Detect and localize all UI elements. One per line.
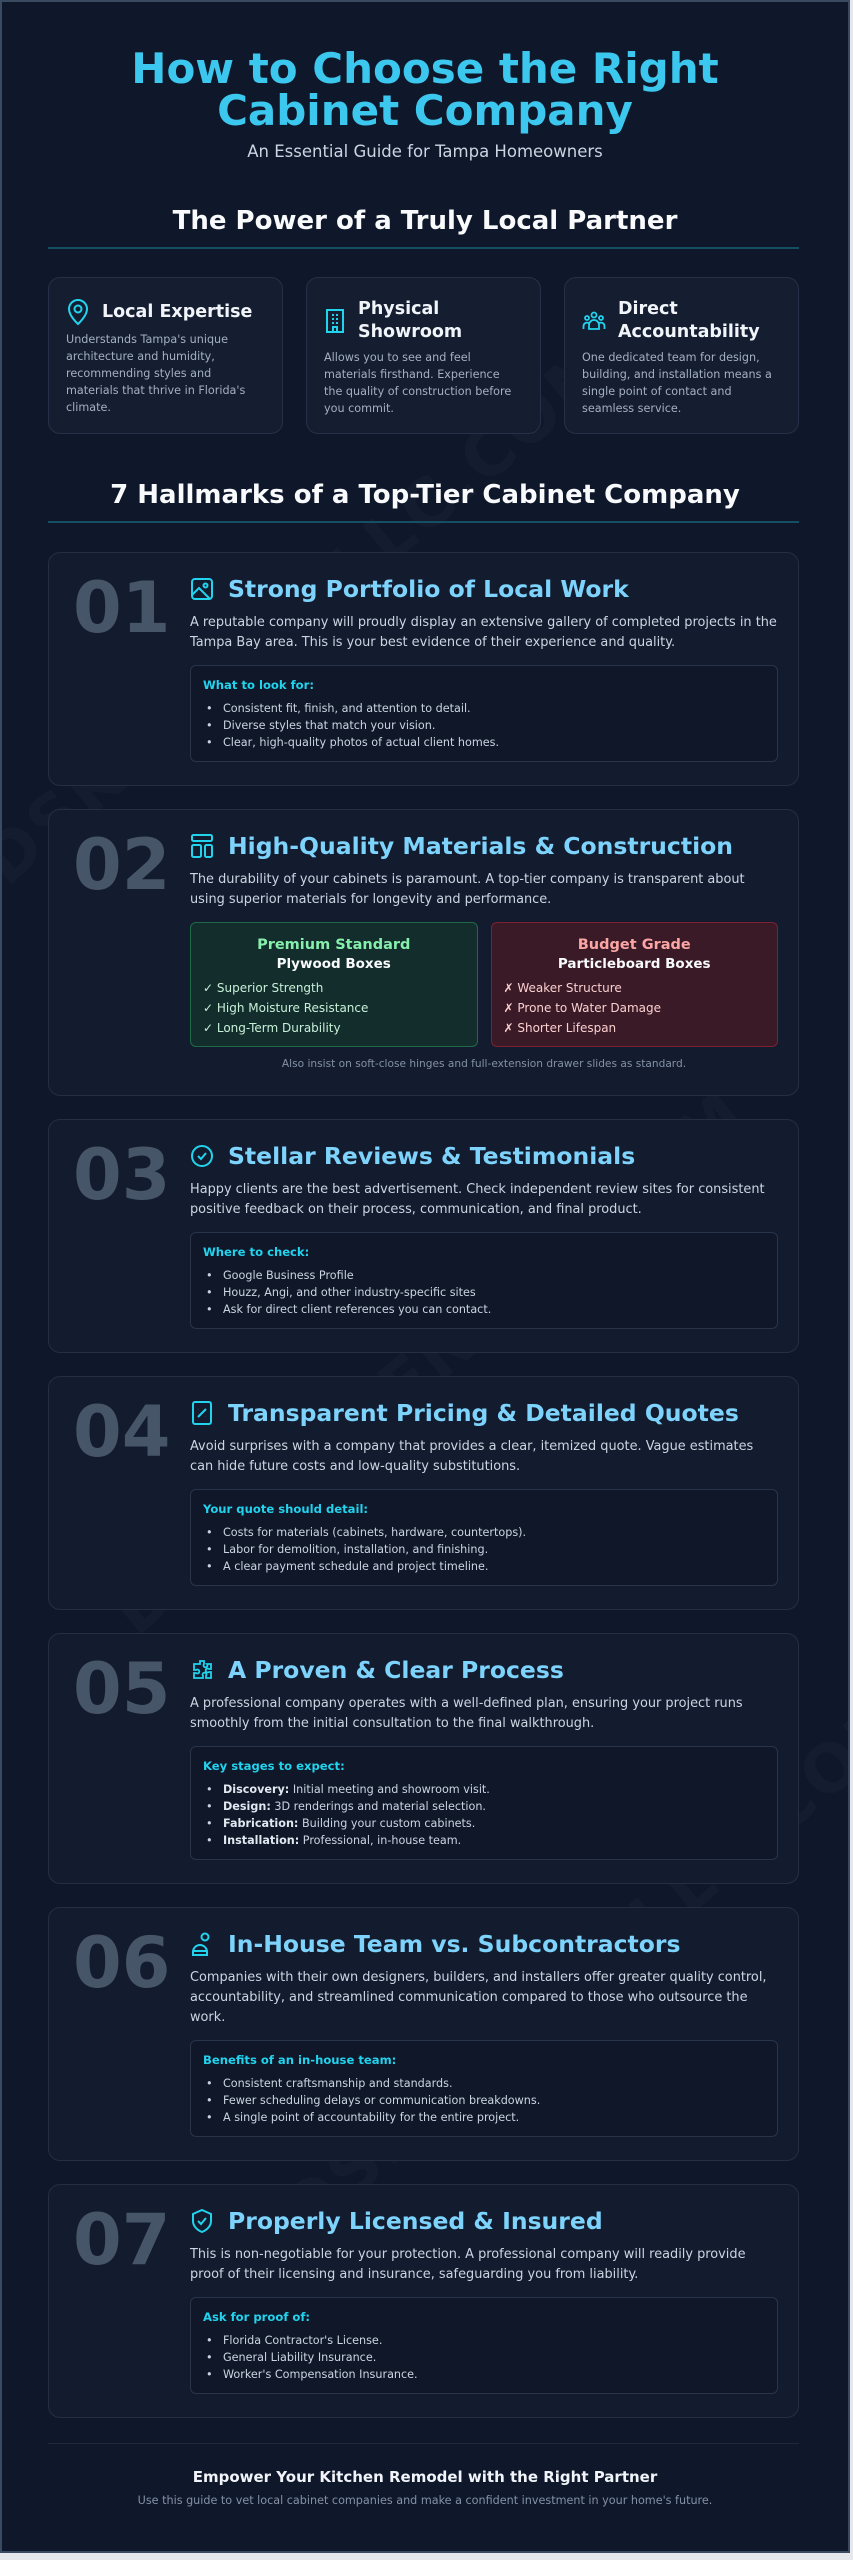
footer title: Empower Your Kitchen Remodel with the Right Partner xyxy=(193,2468,657,2486)
card 04: Costs for materials (cabinets, hardware, countertops). xyxy=(223,1526,526,1539)
title: Cabinet Company xyxy=(217,86,633,135)
checklist 01: Clear, high-quality photos of actual client homes. xyxy=(223,736,499,749)
card 03: Happy clients are the best advertisement. Check independent review sites for consistent positive feedback on their process, communication, and final product. xyxy=(190,1182,765,1217)
heading 06: In-House Team vs. Subcontractors xyxy=(228,1930,681,1958)
comparison: Premium Standard xyxy=(257,937,410,953)
card: physical showroom: Showroom xyxy=(358,322,462,342)
comparison: ✓ Long-Term Durability xyxy=(203,1021,341,1035)
title xyxy=(131,44,719,135)
card: physical showroom: Physical xyxy=(358,299,439,319)
checklist 01: What to look for: xyxy=(203,678,314,692)
heading 05: A Proven & Clear Process xyxy=(228,1656,564,1684)
heading 04: Transparent Pricing & Detailed Quotes xyxy=(228,1399,739,1427)
heading: local partner: The Power of a Truly Local Partner xyxy=(173,206,677,236)
card 03: Where to check: xyxy=(203,1245,309,1259)
card 07: General Liability Insurance. xyxy=(223,2351,376,2364)
card 01: 01 xyxy=(73,567,170,649)
icon: map pin xyxy=(68,299,88,326)
card 05: Installation: Professional, in-house team. xyxy=(223,1834,461,1847)
card 06: Fewer scheduling delays or communication breakdowns. xyxy=(223,2094,540,2107)
card 06: Consistent craftsmanship and standards. xyxy=(223,2077,453,2090)
heading: 7 hallmarks: 7 Hallmarks of a Top-Tier Cabinet Company xyxy=(110,480,740,510)
card 05 xyxy=(48,1633,799,1884)
icon: building xyxy=(326,309,344,333)
card 03: 03 xyxy=(73,1134,170,1216)
card 07 xyxy=(48,2184,799,2418)
card: physical showroom: Allows you to see and feel materials firsthand. Experience the quality of construction before you commit. xyxy=(324,351,511,415)
card 05: Design: 3D renderings and material selection. xyxy=(223,1800,486,1813)
footer text: Use this guide to vet local cabinet companies and make a confident investment in your home's future. xyxy=(138,2494,712,2507)
card: direct accountability: Direct xyxy=(618,299,678,319)
card 03 xyxy=(48,1119,799,1353)
card 06: 06 xyxy=(73,1922,170,2004)
card: local expertise: Understands Tampa's unique architecture and humidity, recommending styles and materials that thrive in Florida's climate. xyxy=(66,333,245,414)
comparison: ✗ Weaker Structure xyxy=(504,981,622,995)
card 06: Companies with their own designers, builders, and installers offer greater quality control, accountability, and streamlined communication compared to those who outsource the work. xyxy=(190,1970,767,2025)
card 02: The durability of your cabinets is paramount. A top-tier company is transparent about using superior materials for longevity and performance. xyxy=(190,872,745,907)
card 07: Worker's Compensation Insurance. xyxy=(223,2368,418,2381)
card 04: Labor for demolition, installation, and finishing. xyxy=(223,1543,488,1556)
card 01: A reputable company will proudly display an extensive gallery of completed projects in the Tampa Bay area. This is your best evidence of their experience and quality. xyxy=(190,615,777,650)
heading 01: Strong Portfolio of Local Work xyxy=(228,575,629,603)
card 07: Florida Contractor's License. xyxy=(223,2334,382,2347)
card 01 xyxy=(48,552,799,786)
card: physical showroom xyxy=(306,277,541,434)
comparison: ✓ High Moisture Resistance xyxy=(203,1001,368,1015)
card: local expertise xyxy=(48,277,283,434)
card: direct accountability: One dedicated team for design, building, and installation means a single point of contact and seamless service. xyxy=(582,351,772,415)
card 06 xyxy=(48,1907,799,2161)
heading 07: Properly Licensed & Insured xyxy=(228,2207,603,2235)
heading 02: High-Quality Materials & Construction xyxy=(228,832,733,860)
heading 03: Stellar Reviews & Testimonials xyxy=(228,1142,635,1170)
card: local expertise: Local Expertise xyxy=(102,302,252,322)
card 02: Also insist on soft-close hinges and full-extension drawer slides as standard. xyxy=(282,1058,686,1070)
card 02: 02 xyxy=(73,824,170,906)
checklist 01 xyxy=(190,665,778,762)
checklist 01: Consistent fit, finish, and attention to detail. xyxy=(223,702,471,715)
card 07: This is non-negotiable for your protection. A professional company will readily provide proof of their licensing and insurance, safeguarding you from liability. xyxy=(190,2247,746,2282)
card 04: Your quote should detail: xyxy=(203,1502,368,1516)
comparison xyxy=(190,922,778,1047)
card 04: Avoid surprises with a company that provides a clear, itemized quote. Vague estimates can hide future costs and low-quality substitutions. xyxy=(190,1439,753,1474)
card 03: Google Business Profile xyxy=(223,1269,354,1282)
card 04 xyxy=(48,1376,799,1610)
card 05: Discovery: Initial meeting and showroom visit. xyxy=(223,1783,490,1796)
card 05: 05 xyxy=(73,1648,170,1730)
card 05: Fabrication: Building your custom cabinets. xyxy=(223,1817,475,1830)
hallmark cards xyxy=(48,552,799,2418)
card 05: A professional company operates with a well-defined plan, ensuring your project runs smoothly from the initial consultation to the final walkthrough. xyxy=(190,1696,743,1731)
card 03: Ask for direct client references you can contact. xyxy=(223,1303,491,1316)
watermark: DSKITCHENLLC.COM xyxy=(97,1075,762,1650)
card 06: A single point of accountability for the entire project. xyxy=(223,2111,519,2124)
card 07: Ask for proof of: xyxy=(203,2310,310,2324)
card 04: A clear payment schedule and project timeline. xyxy=(223,1560,488,1573)
card 06: Benefits of an in-house team: xyxy=(203,2053,396,2067)
card 04: 04 xyxy=(73,1391,170,1473)
checklist 01: Diverse styles that match your vision. xyxy=(223,719,435,732)
icon: team xyxy=(582,312,606,330)
comparison: ✓ Superior Strength xyxy=(203,981,323,995)
card 02 xyxy=(48,809,799,1096)
comparison: Particleboard Boxes xyxy=(558,956,711,972)
card 03: Houzz, Angi, and other industry-specific sites xyxy=(223,1286,476,1299)
card: direct accountability: Accountability xyxy=(618,322,760,342)
card 07: 07 xyxy=(73,2199,170,2281)
comparison: ✗ Shorter Lifespan xyxy=(504,1021,616,1035)
comparison: Budget Grade xyxy=(578,937,691,953)
comparison: Plywood Boxes xyxy=(277,956,391,972)
comparison: ✗ Prone to Water Damage xyxy=(504,1001,661,1015)
subtitle: An Essential Guide for Tampa Homeowners xyxy=(247,142,603,161)
card 05: Key stages to expect: xyxy=(203,1759,345,1773)
title: How to Choose the Right xyxy=(131,44,719,93)
card: direct accountability xyxy=(564,277,799,434)
